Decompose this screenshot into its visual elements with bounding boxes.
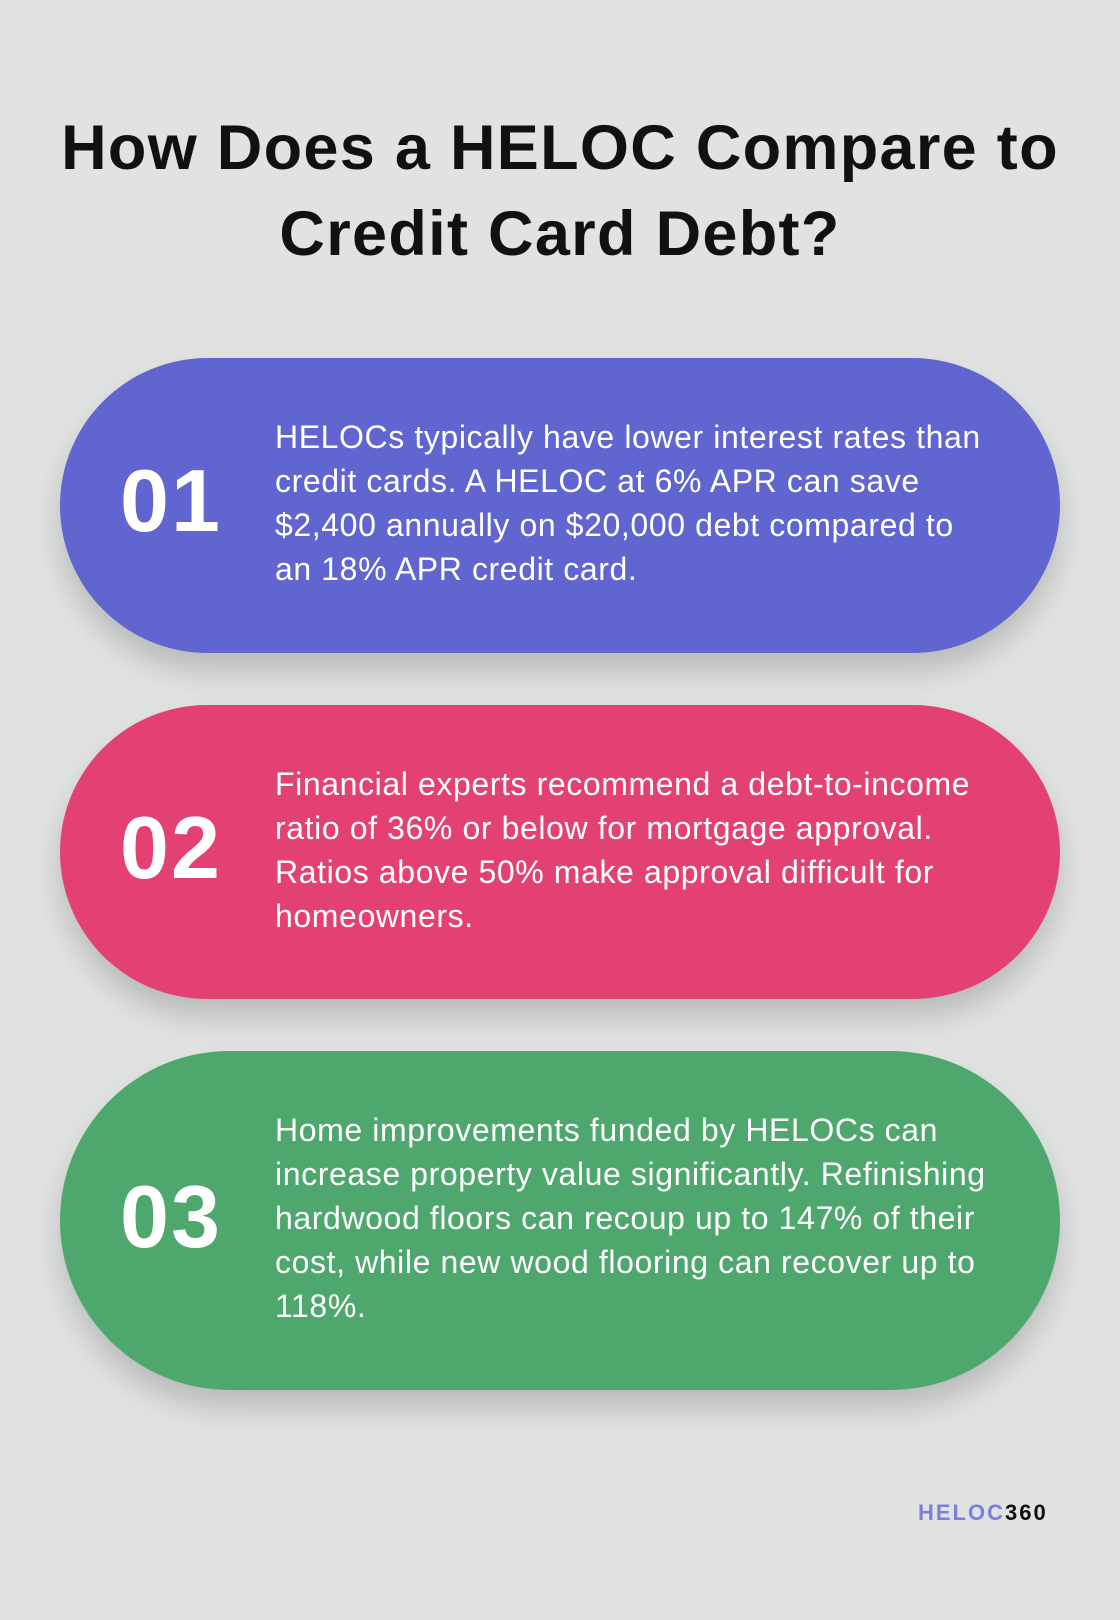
- text 03: increase property value significantly. Refinishing: [275, 1156, 986, 1192]
- panel: 03: [60, 1051, 1060, 1390]
- number 03: 03: [120, 1167, 222, 1266]
- text 02: [275, 766, 970, 934]
- text 01: HELOCs typically have lower interest rates than: [275, 419, 981, 455]
- logo: HELOC360: [918, 1500, 1048, 1525]
- title: Credit Card Debt?: [279, 199, 841, 269]
- text 03: Home improvements funded by HELOCs can: [275, 1112, 938, 1148]
- number 01: 01: [120, 451, 222, 550]
- text 01: credit cards. A HELOC at 6% APR can save: [275, 463, 920, 499]
- panel: 01: [60, 358, 1060, 653]
- text 03: hardwood floors can recoup up to 147% of their: [275, 1200, 975, 1236]
- text 02: homeowners.: [275, 898, 474, 934]
- panel: 02: [60, 705, 1060, 999]
- text 02: ratio of 36% or below for mortgage approval.: [275, 810, 933, 846]
- text 01: [275, 419, 981, 587]
- title: [61, 113, 1059, 269]
- text 01: $2,400 annually on $20,000 debt compared to: [275, 507, 954, 543]
- text 03: cost, while new wood flooring can recover up to: [275, 1244, 976, 1280]
- text 02: Financial experts recommend a debt-to-income: [275, 766, 970, 802]
- title: How Does a HELOC Compare to: [61, 113, 1059, 183]
- text 03: 118%.: [275, 1288, 366, 1324]
- text 02: Ratios above 50% make approval difficult for: [275, 854, 934, 890]
- number 02: 02: [120, 798, 222, 897]
- text 01: an 18% APR credit card.: [275, 551, 637, 587]
- text 03: [275, 1112, 986, 1324]
